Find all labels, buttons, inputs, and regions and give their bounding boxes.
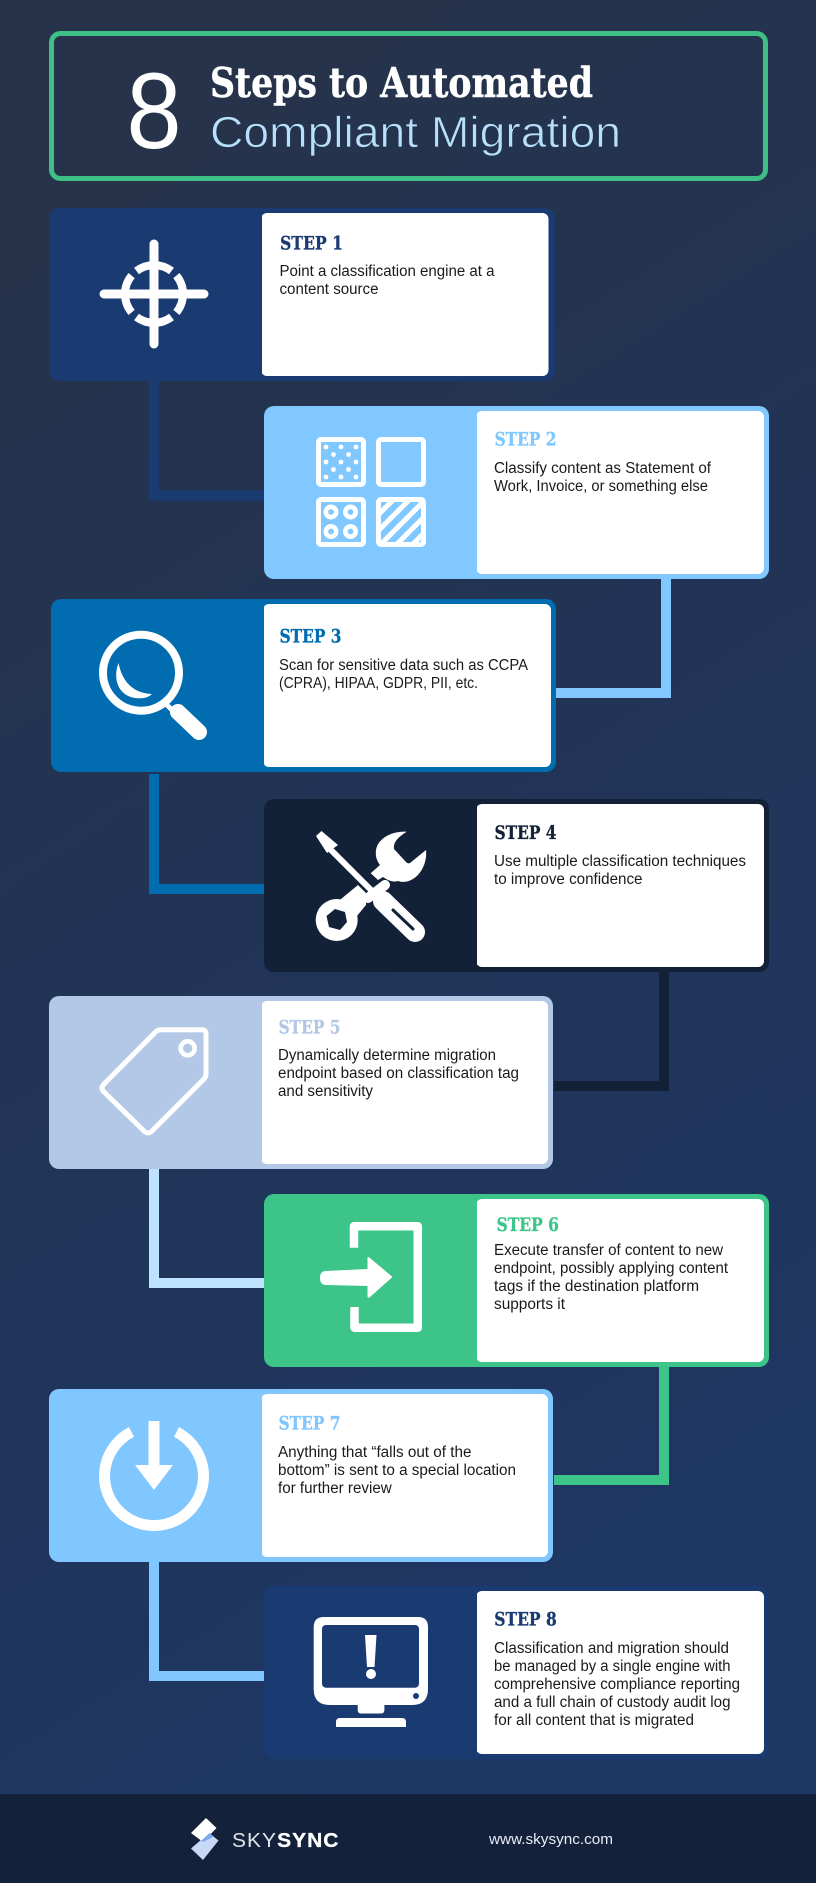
step 5 text: Dynamically determine migration <box>278 1047 496 1064</box>
step 7 heading: STEP 7 <box>278 1414 340 1434</box>
big number 8: 8 <box>126 50 182 171</box>
step 8 text: be managed by a single engine with <box>494 1658 730 1675</box>
step 6 text: Execute transfer of content to new <box>494 1242 724 1259</box>
icon: crosshair <box>104 244 204 344</box>
step 7 text <box>278 1444 516 1497</box>
step 2 heading: STEP 2 <box>494 430 556 450</box>
connector: step 4 to step 5 <box>554 972 664 1086</box>
icon: tag <box>102 1030 206 1133</box>
step 4 heading: STEP 4 <box>494 823 557 844</box>
icon: classification grid <box>318 440 431 544</box>
step 1 heading: STEP 1 <box>280 234 343 254</box>
step 5 text <box>278 1047 519 1100</box>
step 4 text: to improve confidence <box>494 871 642 888</box>
title line 1: Steps to Automated <box>210 59 593 107</box>
step 1 text <box>280 263 495 298</box>
connector: step 2 to step 3 <box>556 579 666 693</box>
connector: step 5 to step 6 <box>154 1169 264 1283</box>
website url: www.skysync.com <box>488 1831 613 1848</box>
step 8 text <box>494 1640 740 1729</box>
step 3 heading: STEP 3 <box>280 626 342 648</box>
icon: magnifying glass <box>103 635 199 732</box>
step 1 text: Point a classification engine at a <box>280 263 495 280</box>
step 7 text: bottom” is sent to a special location <box>278 1462 516 1479</box>
connector: step 3 to step 4 <box>154 774 264 889</box>
connector: step 6 to step 7 <box>554 1367 664 1480</box>
icon: monitor with alert <box>314 1617 428 1727</box>
panel: step 7 <box>49 1389 553 1562</box>
panel: step 6 <box>264 1194 769 1367</box>
footer band <box>0 1794 816 1883</box>
step 8 text: and a full chain of custody audit log <box>494 1694 730 1711</box>
title panel <box>52 34 766 178</box>
step 5 text: and sensitivity <box>278 1083 373 1100</box>
step 8 text: for all content that is migrated <box>494 1712 694 1729</box>
panel: step 4 <box>264 799 769 972</box>
icon: power with down arrow <box>105 1421 204 1526</box>
panel: step 1 <box>49 208 555 381</box>
logo wordmark: SKYSYNC <box>232 1829 340 1852</box>
step 2 text: Classify content as Statement of <box>494 460 712 477</box>
step 5 text: endpoint based on classification tag <box>278 1065 519 1082</box>
connector: step 1 to step 2 <box>154 381 264 496</box>
step 7 text: for further review <box>278 1480 393 1497</box>
step 1 text: content source <box>280 281 378 298</box>
step 6 text <box>494 1242 729 1313</box>
step 6 text: tags if the destination platform <box>494 1278 699 1295</box>
step 6 heading: STEP 6 <box>496 1215 559 1236</box>
step 6 text: endpoint, possibly applying content <box>494 1260 729 1277</box>
title line 2: Compliant Migration <box>210 108 621 157</box>
step 4 text <box>494 853 746 888</box>
step 5 heading: STEP 5 <box>278 1018 340 1038</box>
step 2 text <box>494 460 712 495</box>
title border <box>52 34 766 178</box>
step 8 text: comprehensive compliance reporting <box>494 1676 740 1693</box>
connector: step 7 to step 8 <box>154 1562 264 1676</box>
step 2 text: Work, Invoice, or something else <box>494 478 708 495</box>
panel: step 3 <box>51 599 556 772</box>
step 8 text: Classification and migration should <box>494 1640 729 1657</box>
step 4 text: Use multiple classification techniques <box>494 853 746 870</box>
panel: step 5 <box>49 996 553 1169</box>
panel: step 8 <box>264 1586 768 1759</box>
logo mark <box>191 1818 218 1860</box>
step 3 text <box>279 657 529 692</box>
step 7 text: Anything that “falls out of the <box>278 1444 472 1461</box>
icon: enter arrow <box>320 1226 418 1328</box>
panel: step 2 <box>264 406 769 579</box>
step 6 text: supports it <box>494 1296 566 1313</box>
step 8 heading: STEP 8 <box>494 1610 557 1630</box>
step 3 text: (CPRA), HIPAA, GDPR, PII, etc. <box>279 675 478 692</box>
step 3 text: Scan for sensitive data such as CCPA <box>279 657 529 674</box>
icon: screwdriver and wrench <box>316 831 426 941</box>
